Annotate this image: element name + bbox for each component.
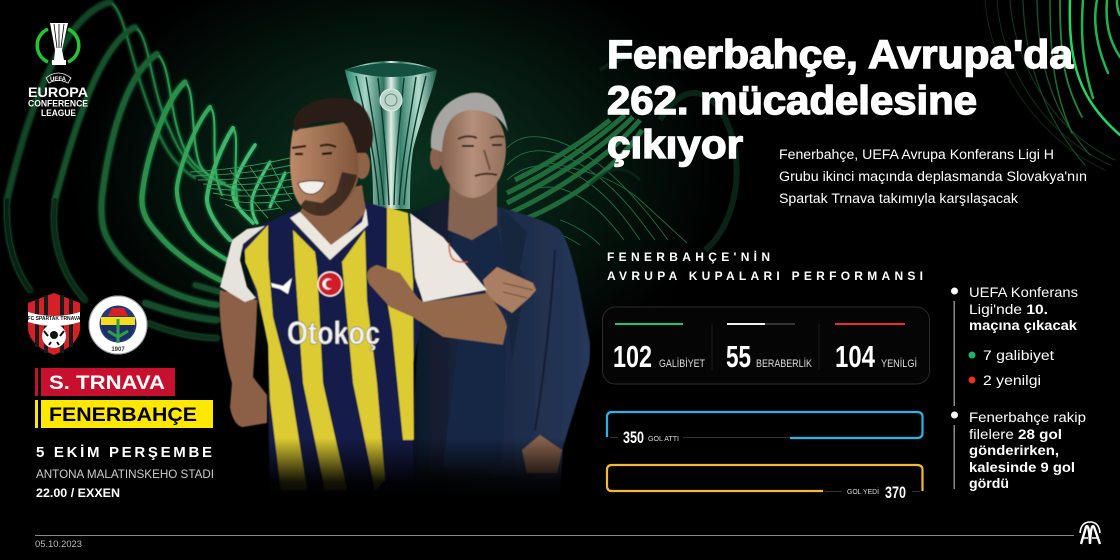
- goals conceded bar: 370: [885, 483, 906, 502]
- section heading: AVRUPA KUPALARI PERFORMANSI: [607, 269, 923, 283]
- lower hand: [522, 435, 562, 473]
- right sleeve: [410, 213, 487, 302]
- jersey: [240, 202, 420, 497]
- stat: draws: 55: [726, 339, 751, 374]
- AA logo: [1080, 522, 1100, 544]
- ear: [430, 146, 442, 170]
- right arm: [367, 265, 507, 345]
- stat: wins: [613, 323, 705, 374]
- jacket: [390, 200, 590, 497]
- hair: [293, 98, 373, 153]
- bullet: goals: gördü: [969, 476, 1009, 491]
- left sleeve: [220, 226, 265, 302]
- bullet: conference league: maçına çıkacak: [969, 318, 1078, 333]
- goals scored bar: GOL ATTI: [648, 434, 679, 443]
- goals scored bar: [607, 412, 922, 447]
- subtitle: Grubu ikinci maçında deplasmanda Slovakya'nın: [779, 169, 1087, 184]
- bullet: goals: filelere 28 gol: [969, 427, 1062, 442]
- stat: wins: 102: [613, 339, 652, 374]
- subtitle: [779, 147, 1087, 206]
- footer line: [35, 535, 1074, 536]
- brows and eyes: [292, 145, 336, 154]
- title: [607, 33, 1074, 167]
- title: çıkıyor: [607, 123, 743, 167]
- collar: [290, 208, 368, 260]
- sponsor text: Otokoç: [287, 315, 380, 351]
- lapels: [500, 207, 527, 360]
- UEFA Europa Conference League logo: [28, 23, 88, 118]
- stat: draws: [726, 323, 813, 374]
- figures bottom fade: [200, 438, 600, 500]
- face: [290, 122, 358, 217]
- goals scored bar: 350: [623, 428, 644, 447]
- bullet: goals: [951, 410, 1086, 491]
- bullet: conference league: 7 galibiyet: [983, 348, 1054, 363]
- bullet: conference league: [951, 285, 1078, 406]
- match info: ANTONA MALATINSKEHO STADI: [36, 467, 214, 481]
- match info: 5 EKİM PERŞEMBE: [36, 444, 212, 461]
- stat: losses: [835, 323, 917, 374]
- right mesh and ribbon: [507, 55, 737, 250]
- Spartak Trnava crest: [28, 293, 81, 355]
- chest hand: [483, 267, 536, 313]
- UEFA Europa Conference League logo: CONFERENCE: [28, 98, 88, 108]
- bullet: goals: kalesinde 9 gol: [969, 460, 1075, 475]
- lower dark strands: [7, 200, 220, 338]
- team: S. Trnava: S. TRNAVA: [49, 373, 165, 394]
- trophy: [345, 61, 437, 209]
- Fenerbahçe crest: 1907: [111, 347, 125, 353]
- stat: draws: BERABERLİK: [756, 357, 813, 370]
- ear: [354, 151, 370, 179]
- stat: losses: 104: [835, 339, 876, 374]
- UEFA Europa Conference League logo: LEAGUE: [41, 108, 76, 118]
- manager figure: [390, 93, 590, 497]
- neck: [298, 185, 366, 250]
- neck: [448, 180, 497, 240]
- left mesh: [190, 158, 296, 218]
- puma logo: [271, 278, 292, 294]
- turkish flag badge: [318, 272, 342, 296]
- left arm: [220, 290, 267, 427]
- goals conceded bar: GOL YEDİ: [847, 487, 879, 496]
- bullet: goals: Fenerbahçe rakip: [969, 410, 1086, 425]
- match info: [36, 444, 214, 500]
- face: [439, 107, 506, 198]
- subtitle: Spartak Trnava takımıyla karşılaşacak: [779, 191, 1018, 206]
- section heading: FENERBAHÇE'NİN: [607, 249, 770, 264]
- bullet: goals: gönderirken,: [969, 443, 1059, 458]
- bullet list: [951, 285, 1086, 491]
- section heading: [607, 249, 923, 283]
- goals conceded bar: [607, 465, 922, 502]
- team: Fenerbahçe: FENERBAHÇE: [49, 405, 197, 426]
- team: S. Trnava: [35, 368, 175, 396]
- falling thin strands: [110, 2, 240, 205]
- title: 262. mücadelesine: [607, 79, 977, 123]
- eyes, nose and mouth: [458, 136, 504, 176]
- stat: losses: YENİLGİ: [881, 357, 917, 370]
- rising bands with lower curls: [7, 2, 110, 200]
- Fenerbahçe crest: [88, 296, 148, 354]
- stat: wins: GALİBİYET: [659, 357, 705, 370]
- Spartak Trnava crest: FC SPARTAK TRNAVA: [28, 316, 81, 322]
- date: 05.10.2023: [35, 539, 82, 549]
- UEFA Europa Conference League logo: EUROPA: [28, 84, 88, 100]
- hair: [431, 93, 508, 152]
- beard: [300, 172, 357, 216]
- left green ribbon waves: [7, 2, 285, 338]
- bullet: conference league: Ligi'nde 10.: [969, 302, 1048, 317]
- subtitle: Fenerbahçe, UEFA Avrupa Konferans Ligi H: [779, 147, 1054, 162]
- title: Fenerbahçe, Avrupa'da: [607, 33, 1074, 77]
- smile: [298, 181, 325, 194]
- bullet: conference league: UEFA Konferans: [969, 285, 1078, 300]
- player figure: [220, 98, 507, 497]
- yellow stripes: [245, 207, 414, 490]
- match info: 22.00 / EXXEN: [36, 488, 120, 500]
- team: Fenerbahçe: [35, 400, 213, 428]
- UEFA Europa Conference League logo: UEFA: [50, 77, 67, 83]
- bullet: conference league: 2 yenilgi: [983, 373, 1041, 388]
- t-shirt: [443, 227, 507, 467]
- top right green arcs: [985, 0, 1120, 170]
- stats panel: [602, 307, 930, 384]
